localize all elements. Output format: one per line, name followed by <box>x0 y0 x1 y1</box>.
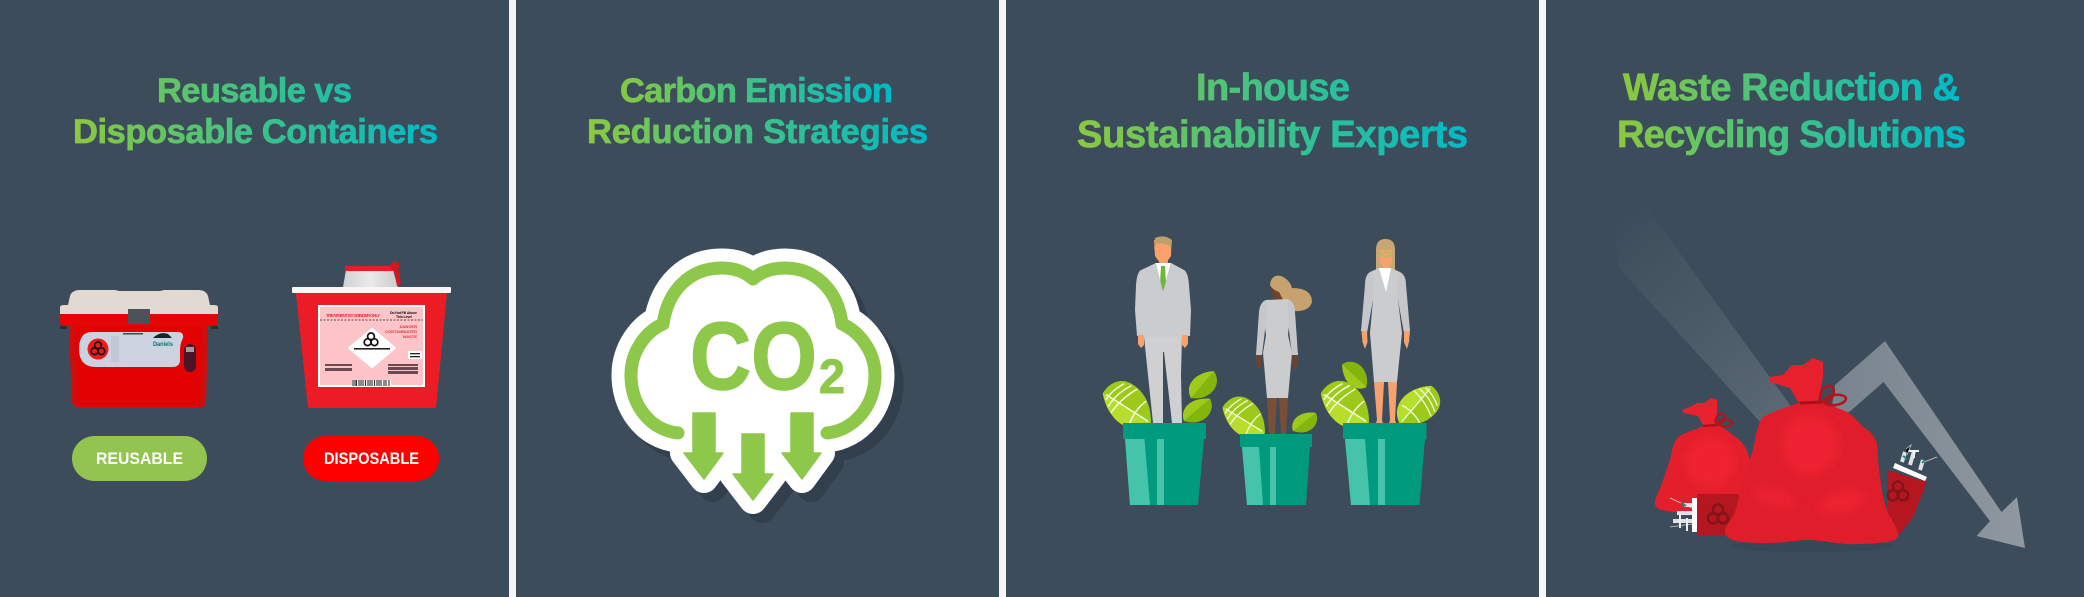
icon: disposable sharps container: DANGER <box>400 324 417 329</box>
label pill: reusable <box>72 436 207 481</box>
heading: in-house sustainability experts: In-house <box>1196 67 1350 109</box>
heading: reusable vs disposable containers: Disposable Containers <box>73 113 438 151</box>
label pill: reusable: REUSABLE <box>96 450 183 468</box>
heading: carbon emission reduction strategies: Reduction Strategies <box>587 113 928 151</box>
icon: CO2 cloud with down arrows <box>631 268 884 509</box>
heading: reusable vs disposable containers: Reusable vs <box>157 72 352 110</box>
icon: sharps container left <box>1670 494 1739 535</box>
figure: man in suit on plant pot <box>1095 236 1223 439</box>
icon: plant pot left <box>1123 423 1206 505</box>
heading: carbon emission reduction strategies: Carbon Emission <box>620 72 893 110</box>
icon: small red waste bag <box>1655 398 1760 512</box>
icon: CO2 cloud with down arrows: CO <box>690 303 817 410</box>
arrow: fading downward trend line <box>1611 194 2025 548</box>
label pill: disposable <box>303 436 439 481</box>
heading: waste reduction and recycling solutions <box>1617 67 1966 156</box>
heading: carbon emission reduction strategies <box>587 72 928 151</box>
panel: carbon emission reduction strategies <box>587 72 928 509</box>
figure: woman in dress on plant pot <box>1313 239 1447 438</box>
icon: CO2 cloud with down arrows: 2 <box>819 351 845 404</box>
icon: sharps container right <box>1887 445 1937 535</box>
icon: reusable sharps container: Daniels <box>153 341 173 348</box>
icon: disposable sharps container: This Level <box>396 315 412 319</box>
heading: in-house sustainability experts: Sustainability Experts <box>1077 114 1468 156</box>
icon: disposable sharps container: Do Not Fill Above <box>390 311 417 315</box>
icon: large red waste bag <box>1725 358 1898 552</box>
panel: waste reduction and recycling solutions <box>1611 67 2025 552</box>
icon: disposable sharps container: CONTAMINATED <box>385 329 417 334</box>
figure: woman with flowing hair on plant pot <box>1216 276 1322 447</box>
heading: waste reduction and recycling solutions: Waste Reduction & <box>1623 67 1960 109</box>
icon: plant pot centre <box>1240 434 1312 505</box>
panel: reusable vs disposable containers <box>60 72 451 481</box>
icon: plant pot right <box>1343 423 1426 505</box>
heading: in-house sustainability experts <box>1077 67 1468 156</box>
heading: waste reduction and recycling solutions: Recycling Solutions <box>1617 114 1966 156</box>
label pill: disposable: DISPOSABLE <box>324 450 419 468</box>
icon: reusable sharps container <box>60 290 218 407</box>
panel: in-house sustainability experts <box>1077 67 1468 505</box>
icon: disposable sharps container: TREATMENT BY GRINDER ONLY <box>326 313 380 318</box>
heading: reusable vs disposable containers <box>73 72 438 151</box>
icon: disposable sharps container: WASTE <box>403 334 417 339</box>
icon: disposable sharps container <box>292 262 451 408</box>
